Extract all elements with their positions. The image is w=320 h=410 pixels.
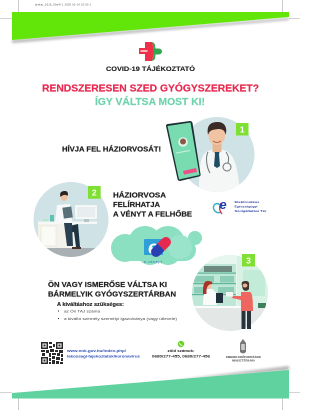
badge 1: 1 — [240, 124, 245, 134]
green numbers: 0680/277-455, 0680/277-456 — [152, 354, 210, 358]
badge 2: 2 — [92, 188, 97, 198]
badge 2 — [88, 186, 101, 199]
QR code — [41, 342, 63, 364]
e-recept logo — [144, 235, 173, 264]
requirements list: az Ön TAJ száma — [64, 310, 101, 314]
e-recept cloud — [111, 226, 202, 265]
step 1 text: HÍVJA FEL HÁZIORVOSÁT! — [62, 144, 161, 154]
badge 3 — [242, 254, 255, 266]
top green banner — [12, 12, 289, 43]
requirements list: A kiváltáshoz szükséges: — [57, 302, 124, 308]
EESZT logo: Elektronikus — [234, 200, 260, 204]
title: COVID-19 TÁJÉKOZTATÓ — [106, 64, 195, 73]
logo: NNK cross — [139, 42, 162, 61]
ministry crest and name — [226, 339, 262, 362]
requirements list — [57, 302, 178, 321]
EESZT logo: Szolgáltatási Tér — [234, 209, 268, 213]
website link — [66, 348, 140, 358]
step 2 illustration: doctor at desk — [34, 182, 108, 257]
step 2 text — [113, 190, 192, 218]
step 3 text: ÖN VAGY ISMERŐSE VÁLTSA KI — [48, 280, 167, 289]
print slug: plakat_2015_50p4f 1 2020 03 14 10:00 1 — [35, 4, 92, 6]
step 2 text: HÁZIORVOSA — [113, 190, 166, 200]
headline: RENDSZERESEN SZED GYÓGYSZEREKET? — [42, 82, 259, 94]
step 2 text: A VÉNYT A FELHŐBE — [113, 210, 192, 218]
step 2 text: FELÍRHATJA — [113, 200, 160, 209]
ministry crest and name: MINISZTÉRIUMA — [232, 360, 255, 362]
EESZT logo — [213, 197, 268, 214]
icon: phone — [178, 341, 184, 347]
ministry crest and name: EMBERI ERŐFORRÁSOK — [226, 354, 262, 359]
website link: www.nnk.gov.hu/index.php/ — [66, 348, 127, 353]
subheadline: ÍGY VÁLTSA MOST KI! — [95, 96, 205, 108]
website link: lakossagi-tajekoztatok/koronavirus — [67, 354, 140, 358]
bottom green banner — [12, 366, 289, 398]
green numbers — [152, 349, 210, 358]
phone — [166, 121, 201, 181]
step 3 text — [48, 280, 176, 298]
requirements list: a kiváltó személy személyi igazolványa (vagy útlevele) — [64, 317, 178, 321]
e-recept logo: e-recept — [144, 260, 162, 264]
step 3 text: BÁRMELYIK GYÓGYSZERTÁRBAN — [48, 290, 176, 298]
EESZT logo: e — [219, 197, 227, 212]
step 3 illustration: pharmacy — [190, 255, 270, 333]
badge 1 — [236, 123, 248, 136]
green numbers: zöld számok: — [168, 349, 194, 353]
e-recept logo: e — [148, 238, 159, 259]
badge 3: 3 — [246, 256, 251, 266]
EESZT logo: Egészségügyi — [234, 204, 258, 208]
step 1 illustration: doctor with phone — [166, 117, 254, 195]
